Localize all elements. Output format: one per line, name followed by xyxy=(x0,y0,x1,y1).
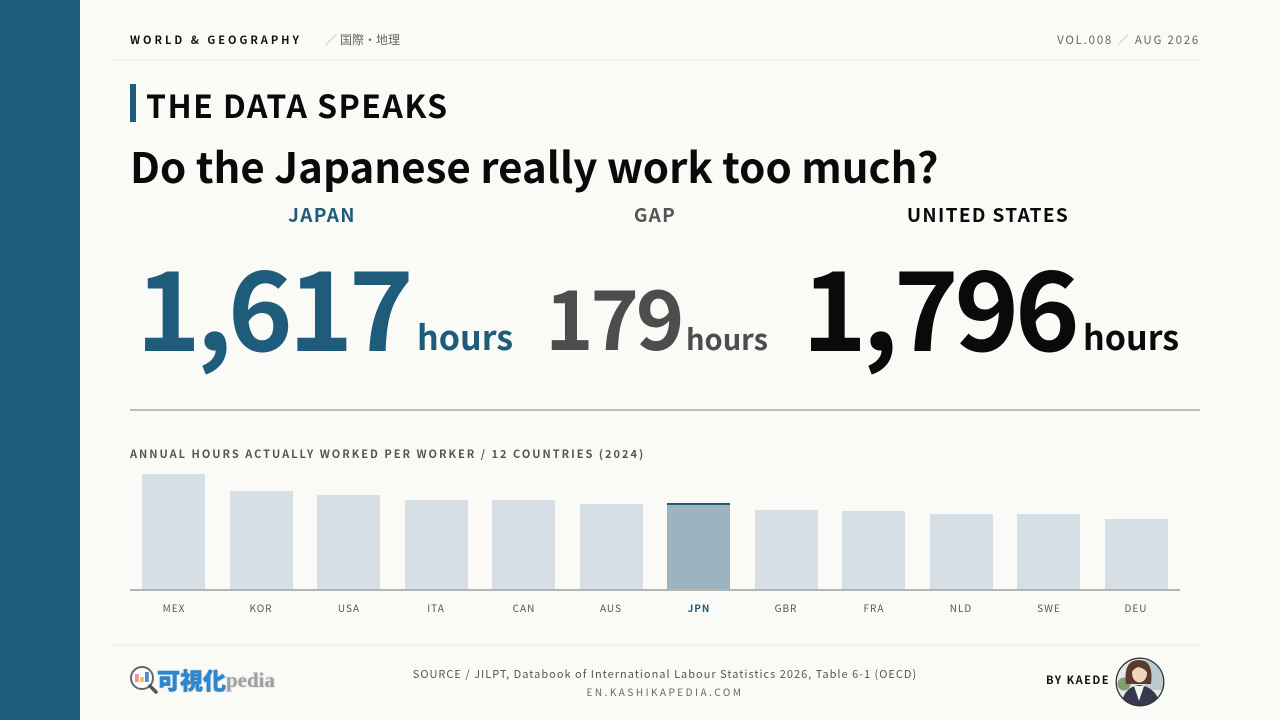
sidebar xyxy=(0,0,80,720)
header japanese category: 国際・地理 xyxy=(340,31,400,48)
header japanese category: ／ xyxy=(325,31,337,48)
bar chart: JPN xyxy=(688,600,710,615)
stat: japan: hours xyxy=(417,311,513,360)
bar chart: KOR xyxy=(249,600,272,615)
bar chart: MEX xyxy=(163,600,185,615)
title: Do the Japanese really work too much? xyxy=(130,135,938,196)
stat: united states: 1,796 xyxy=(802,223,1075,383)
bar chart: CAN xyxy=(513,600,535,615)
bar chart: SWE xyxy=(1037,600,1061,615)
stat: united states xyxy=(802,201,1179,383)
bar chart: GBR xyxy=(775,600,797,615)
site url: EN.KASHIKAPEDIA.COM xyxy=(587,684,743,699)
section label: THE DATA SPEAKS xyxy=(146,82,449,128)
logo: 可視化 xyxy=(157,662,226,696)
stat: gap xyxy=(545,201,768,374)
stat: gap: hours xyxy=(686,317,768,359)
logo: pedia xyxy=(226,668,275,692)
bar chart: FRA xyxy=(864,600,884,615)
stat: japan: JAPAN xyxy=(288,201,356,228)
bar chart: NLD xyxy=(950,600,972,615)
header volume: VOL.008 ／ AUG 2026 xyxy=(1057,32,1200,48)
bar chart: DEU xyxy=(1124,600,1147,615)
logo xyxy=(130,662,275,696)
stat: japan: 1,617 xyxy=(136,223,409,383)
stat: gap: 179 xyxy=(545,254,681,374)
stat: gap: GAP xyxy=(634,201,676,228)
chart title: ANNUAL HOURS ACTUALLY WORKED PER WORKER / 12 COUNTRIES (2024) xyxy=(130,446,645,462)
bar chart: AUS xyxy=(600,600,622,615)
avatar xyxy=(1116,658,1164,706)
source: SOURCE / JILPT, Databook of International Labour Statistics 2026, Table 6-1 (OECD) xyxy=(413,666,917,682)
icon: magnifier with bars xyxy=(130,666,158,694)
byline: BY KAEDE xyxy=(1046,672,1110,688)
bar chart: ITA xyxy=(427,600,445,615)
stat: united states: UNITED STATES xyxy=(907,201,1069,228)
stat: japan xyxy=(136,201,513,383)
stat: united states: hours xyxy=(1083,311,1179,360)
header category: WORLD & GEOGRAPHY xyxy=(130,32,302,48)
bar chart: USA xyxy=(338,600,360,615)
